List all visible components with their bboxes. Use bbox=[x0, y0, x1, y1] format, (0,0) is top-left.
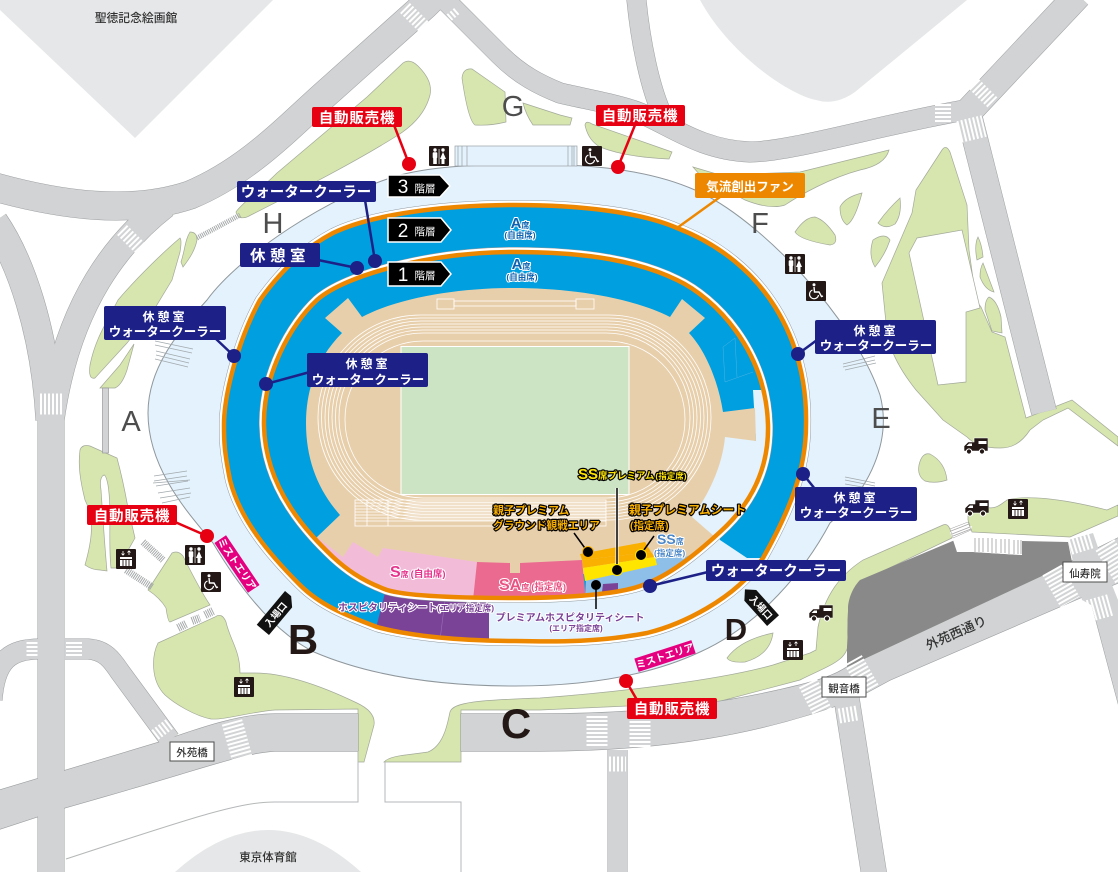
callout: rest room and water cooler east lower: 休憩室 bbox=[833, 490, 879, 505]
label: premium hospitality seat: (エリア指定席) bbox=[549, 623, 603, 633]
entrance arrow left: 入場口 bbox=[262, 600, 290, 630]
floor marker 1F: 1 bbox=[398, 265, 408, 286]
zone letter E: E bbox=[871, 403, 891, 435]
icon: wheelchair north bbox=[582, 146, 602, 166]
leader: family ground area bbox=[574, 533, 594, 558]
place name: 聖徳記念絵画館: 聖徳記念絵画館 bbox=[95, 11, 177, 25]
parking area bbox=[847, 522, 1072, 667]
zone letter C: C bbox=[501, 700, 531, 747]
entrance arrow right: 入場口 bbox=[747, 593, 775, 622]
place box: 観音橋 bbox=[822, 677, 866, 697]
zone letter F: F bbox=[751, 208, 769, 240]
concourse stairs bbox=[153, 146, 876, 503]
label: family premium ground area: 親子プレミアム bbox=[493, 503, 569, 517]
zone letter G: G bbox=[502, 91, 524, 123]
icon: restroom west bbox=[185, 545, 205, 565]
callout: airflow fan bbox=[677, 173, 805, 228]
track and infield bbox=[306, 288, 756, 610]
SS premium area bbox=[580, 542, 657, 592]
callout: vending north west: 自動販売機 bbox=[319, 109, 395, 127]
label: family premium ground area bbox=[493, 503, 600, 532]
callout: rest room and water cooler west outer bbox=[104, 306, 241, 363]
callout: rest room and water cooler east upper bbox=[791, 320, 936, 361]
label: family premium seat: (指定席) bbox=[630, 519, 668, 532]
outer seating tier bbox=[224, 205, 806, 650]
icon: wheelchair east bbox=[806, 281, 826, 301]
icon: elevator south west bbox=[234, 677, 254, 697]
callout: airflow fan: 気流創出ファン bbox=[706, 179, 794, 194]
inner seating tier bbox=[264, 252, 775, 610]
mist area left: ミストエリア bbox=[215, 536, 258, 593]
seat label SS: (指定席) bbox=[654, 548, 685, 558]
callout: rest room and water cooler west inner: 休憩室 bbox=[345, 356, 391, 371]
label: family premium ground area: グラウンド観戦エリア bbox=[493, 519, 600, 532]
callout: vending north bbox=[596, 105, 685, 174]
place box: 仙寿院: 仙寿院 bbox=[1069, 567, 1101, 580]
seat label A upper bbox=[504, 215, 536, 240]
callout: vending west bbox=[87, 505, 214, 543]
floor marker 2F bbox=[388, 218, 451, 242]
callout: rest room and water cooler east upper: ウォータークーラー bbox=[820, 339, 932, 353]
SA seats bbox=[474, 560, 586, 596]
seat label A lower: A席 bbox=[512, 256, 530, 273]
floor marker 3F bbox=[388, 175, 450, 198]
seat label A lower: (自由席) bbox=[506, 272, 538, 282]
place box: 外苑橋: 外苑橋 bbox=[176, 746, 208, 759]
icon: elevator south east bbox=[783, 640, 803, 660]
zone letter A: A bbox=[121, 406, 141, 438]
callout: water cooler north: ウォータークーラー bbox=[241, 184, 371, 201]
callout: rest room north: 休憩室 bbox=[250, 246, 310, 265]
callout: rest room and water cooler east lower bbox=[795, 467, 917, 521]
zone letter D: D bbox=[725, 612, 747, 647]
icon: restroom north bbox=[429, 146, 449, 166]
floor marker 2F: 2 bbox=[398, 221, 408, 242]
callout: rest room north bbox=[240, 243, 364, 275]
seat label A upper: (自由席) bbox=[504, 230, 536, 240]
leader: family premium seat bbox=[636, 536, 654, 560]
stadium concourse bbox=[148, 165, 883, 686]
floor marker 3F: 3 bbox=[398, 177, 408, 198]
icon: elevator west bbox=[116, 549, 136, 569]
green areas bbox=[79, 61, 1118, 762]
label: premium hospitality seat: プレミアムホスピタリティシート bbox=[496, 612, 644, 624]
icon: truck lower bbox=[809, 605, 833, 621]
callout: vending west: 自動販売機 bbox=[94, 507, 170, 525]
street name: 外苑西通り: 外苑西通り bbox=[923, 613, 989, 653]
icon: elevator east bbox=[1008, 499, 1028, 519]
entrance arrow left bbox=[257, 591, 297, 635]
callout: rest room and water cooler west outer: ウォータークーラー bbox=[109, 325, 221, 339]
floor marker 1F: 階層 bbox=[414, 270, 436, 282]
mist area bottom: ミストエリア bbox=[635, 641, 696, 671]
zone letter H: H bbox=[263, 208, 283, 240]
zone letter B: B bbox=[288, 616, 318, 663]
entrance arrow right bbox=[739, 584, 779, 626]
label: SS premium: SS席プレミアム(指定席) bbox=[578, 466, 687, 483]
callout: vending south bbox=[619, 674, 717, 719]
seat label SS bbox=[654, 531, 685, 558]
callout: water cooler south bbox=[643, 560, 846, 593]
seat label A lower bbox=[506, 256, 538, 282]
callout: water cooler south: ウォータークーラー bbox=[711, 563, 841, 580]
callout: vending south: 自動販売機 bbox=[634, 700, 710, 718]
callout: rest room and water cooler west inner bbox=[259, 353, 428, 391]
seat label SA: SA席(指定席) bbox=[499, 577, 566, 594]
S seats bbox=[316, 537, 477, 596]
icon: truck middle bbox=[965, 500, 989, 516]
callout: vending north: 自動販売機 bbox=[602, 107, 678, 125]
callout: vending north west bbox=[312, 107, 416, 171]
label: premium hospitality seat bbox=[496, 612, 644, 633]
floor marker 1F bbox=[388, 262, 451, 286]
leader: SS premium bbox=[612, 488, 622, 576]
seat label A upper: A席 bbox=[511, 215, 529, 232]
place box: 仙寿院 bbox=[1063, 562, 1107, 582]
place box: 観音橋: 観音橋 bbox=[828, 682, 860, 695]
seat label SS: SS席 bbox=[657, 531, 684, 547]
label: family premium seat bbox=[629, 503, 746, 532]
callout: rest room and water cooler west inner: ウォータークーラー bbox=[312, 373, 424, 387]
SS seats bbox=[585, 554, 690, 594]
icon: wheelchair west bbox=[201, 572, 221, 592]
callout: rest room and water cooler east lower: ウォータークーラー bbox=[800, 506, 912, 520]
icon: restroom east bbox=[785, 254, 805, 274]
leader: premium hospitality bbox=[591, 580, 601, 609]
floor marker 2F: 階層 bbox=[414, 226, 436, 238]
label: hospitality seat: ホスピタリティシート(エリア指定席) bbox=[338, 602, 494, 614]
callout: water cooler north bbox=[237, 181, 382, 268]
icon: truck upper bbox=[964, 438, 988, 454]
callout: rest room and water cooler west outer: 休憩室 bbox=[142, 309, 188, 324]
place box: 外苑橋 bbox=[170, 742, 214, 761]
place name: 東京体育館: 東京体育館 bbox=[239, 850, 297, 864]
seat label S: S席(自由席) bbox=[390, 564, 446, 581]
floor marker 3F: 階層 bbox=[414, 183, 436, 195]
label: family premium seat: 親子プレミアムシート bbox=[629, 503, 746, 517]
callout: rest room and water cooler east upper: 休憩室 bbox=[853, 323, 899, 338]
